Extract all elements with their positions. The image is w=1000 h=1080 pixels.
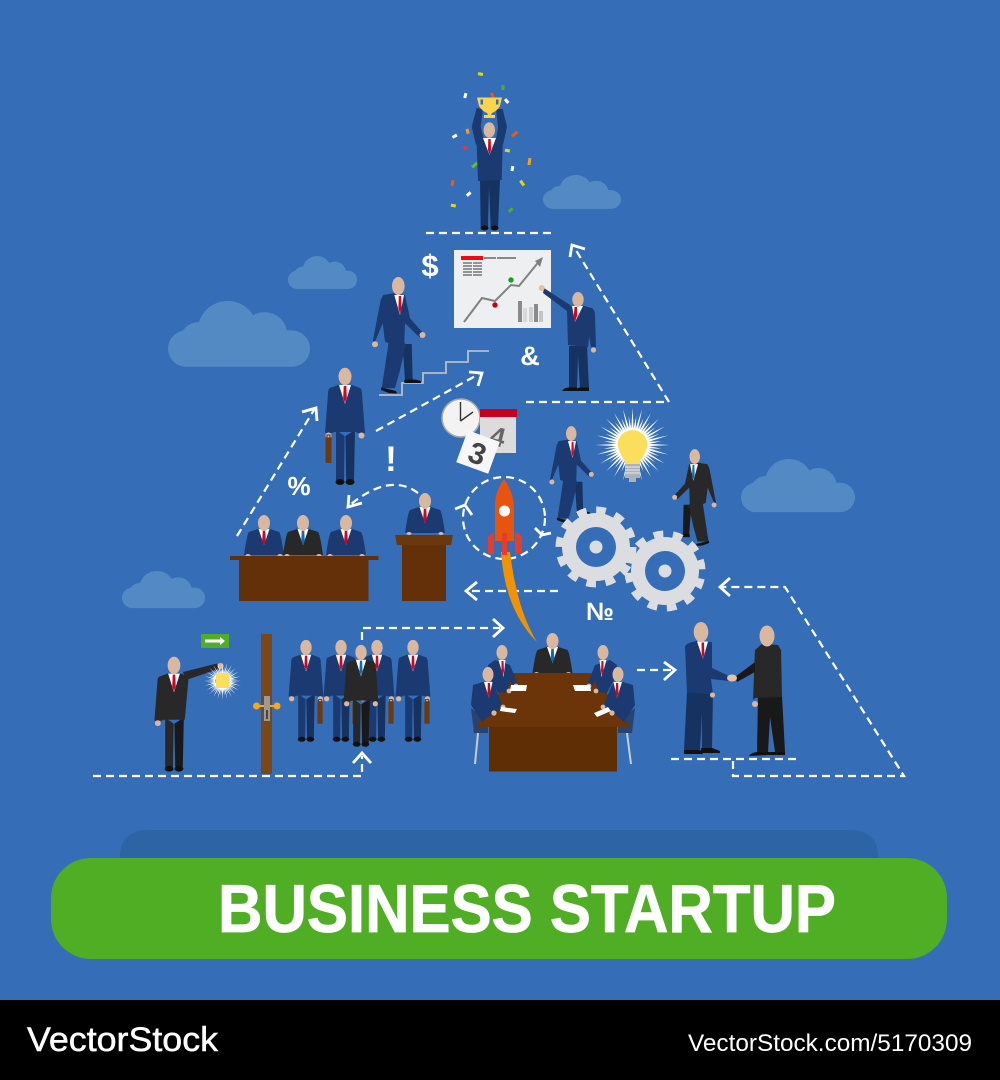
dashed route lines	[93, 233, 904, 776]
symbol: exclamation: !	[385, 440, 397, 479]
board members	[244, 515, 366, 557]
calendar: 4	[487, 421, 509, 453]
man with briefcase	[325, 368, 365, 485]
presenter	[539, 285, 596, 391]
black man	[735, 626, 785, 756]
whiteboard chart	[454, 250, 551, 328]
chairs	[471, 708, 635, 764]
group of employees	[289, 640, 430, 747]
symbol: percent: %	[287, 471, 311, 501]
symbol: numero: №	[586, 598, 614, 626]
green exit sign	[201, 634, 229, 648]
man with lantern	[154, 657, 224, 772]
rocket	[488, 479, 537, 642]
calendar: 3	[464, 436, 491, 473]
banner	[51, 858, 947, 959]
trophy	[477, 98, 502, 118]
footer	[0, 1000, 1000, 1080]
footer url: VectorStock.com/5170309	[688, 1030, 972, 1057]
calendar	[456, 409, 517, 476]
banner backdrop	[120, 830, 878, 858]
light bulb idea	[587, 403, 678, 487]
door	[253, 634, 280, 774]
gears	[560, 510, 708, 614]
banner title: BUSINESS STARTUP	[218, 871, 836, 947]
panel: board table	[230, 515, 378, 601]
papers	[500, 685, 611, 717]
center seated man	[532, 633, 572, 675]
seated people	[471, 645, 635, 722]
desk	[230, 556, 378, 601]
symbol: dollar: $	[421, 248, 439, 283]
blue man	[684, 622, 729, 754]
meeting table	[471, 633, 635, 772]
footer brand: VectorStock	[27, 1021, 219, 1059]
handshake	[684, 622, 785, 756]
confetti	[450, 72, 531, 213]
winner with trophy	[450, 72, 531, 230]
stairs	[379, 351, 489, 395]
symbol: ampersand: &	[520, 341, 540, 371]
walking man blue	[549, 426, 594, 523]
arrowheads	[302, 245, 730, 763]
walking man black	[672, 449, 717, 546]
man climbing stairs	[372, 277, 426, 394]
clock	[442, 399, 480, 437]
speaker at podium	[395, 493, 453, 601]
man with raised arms	[472, 108, 507, 230]
glowing light	[200, 660, 245, 702]
clouds	[122, 175, 855, 608]
table	[476, 673, 630, 772]
